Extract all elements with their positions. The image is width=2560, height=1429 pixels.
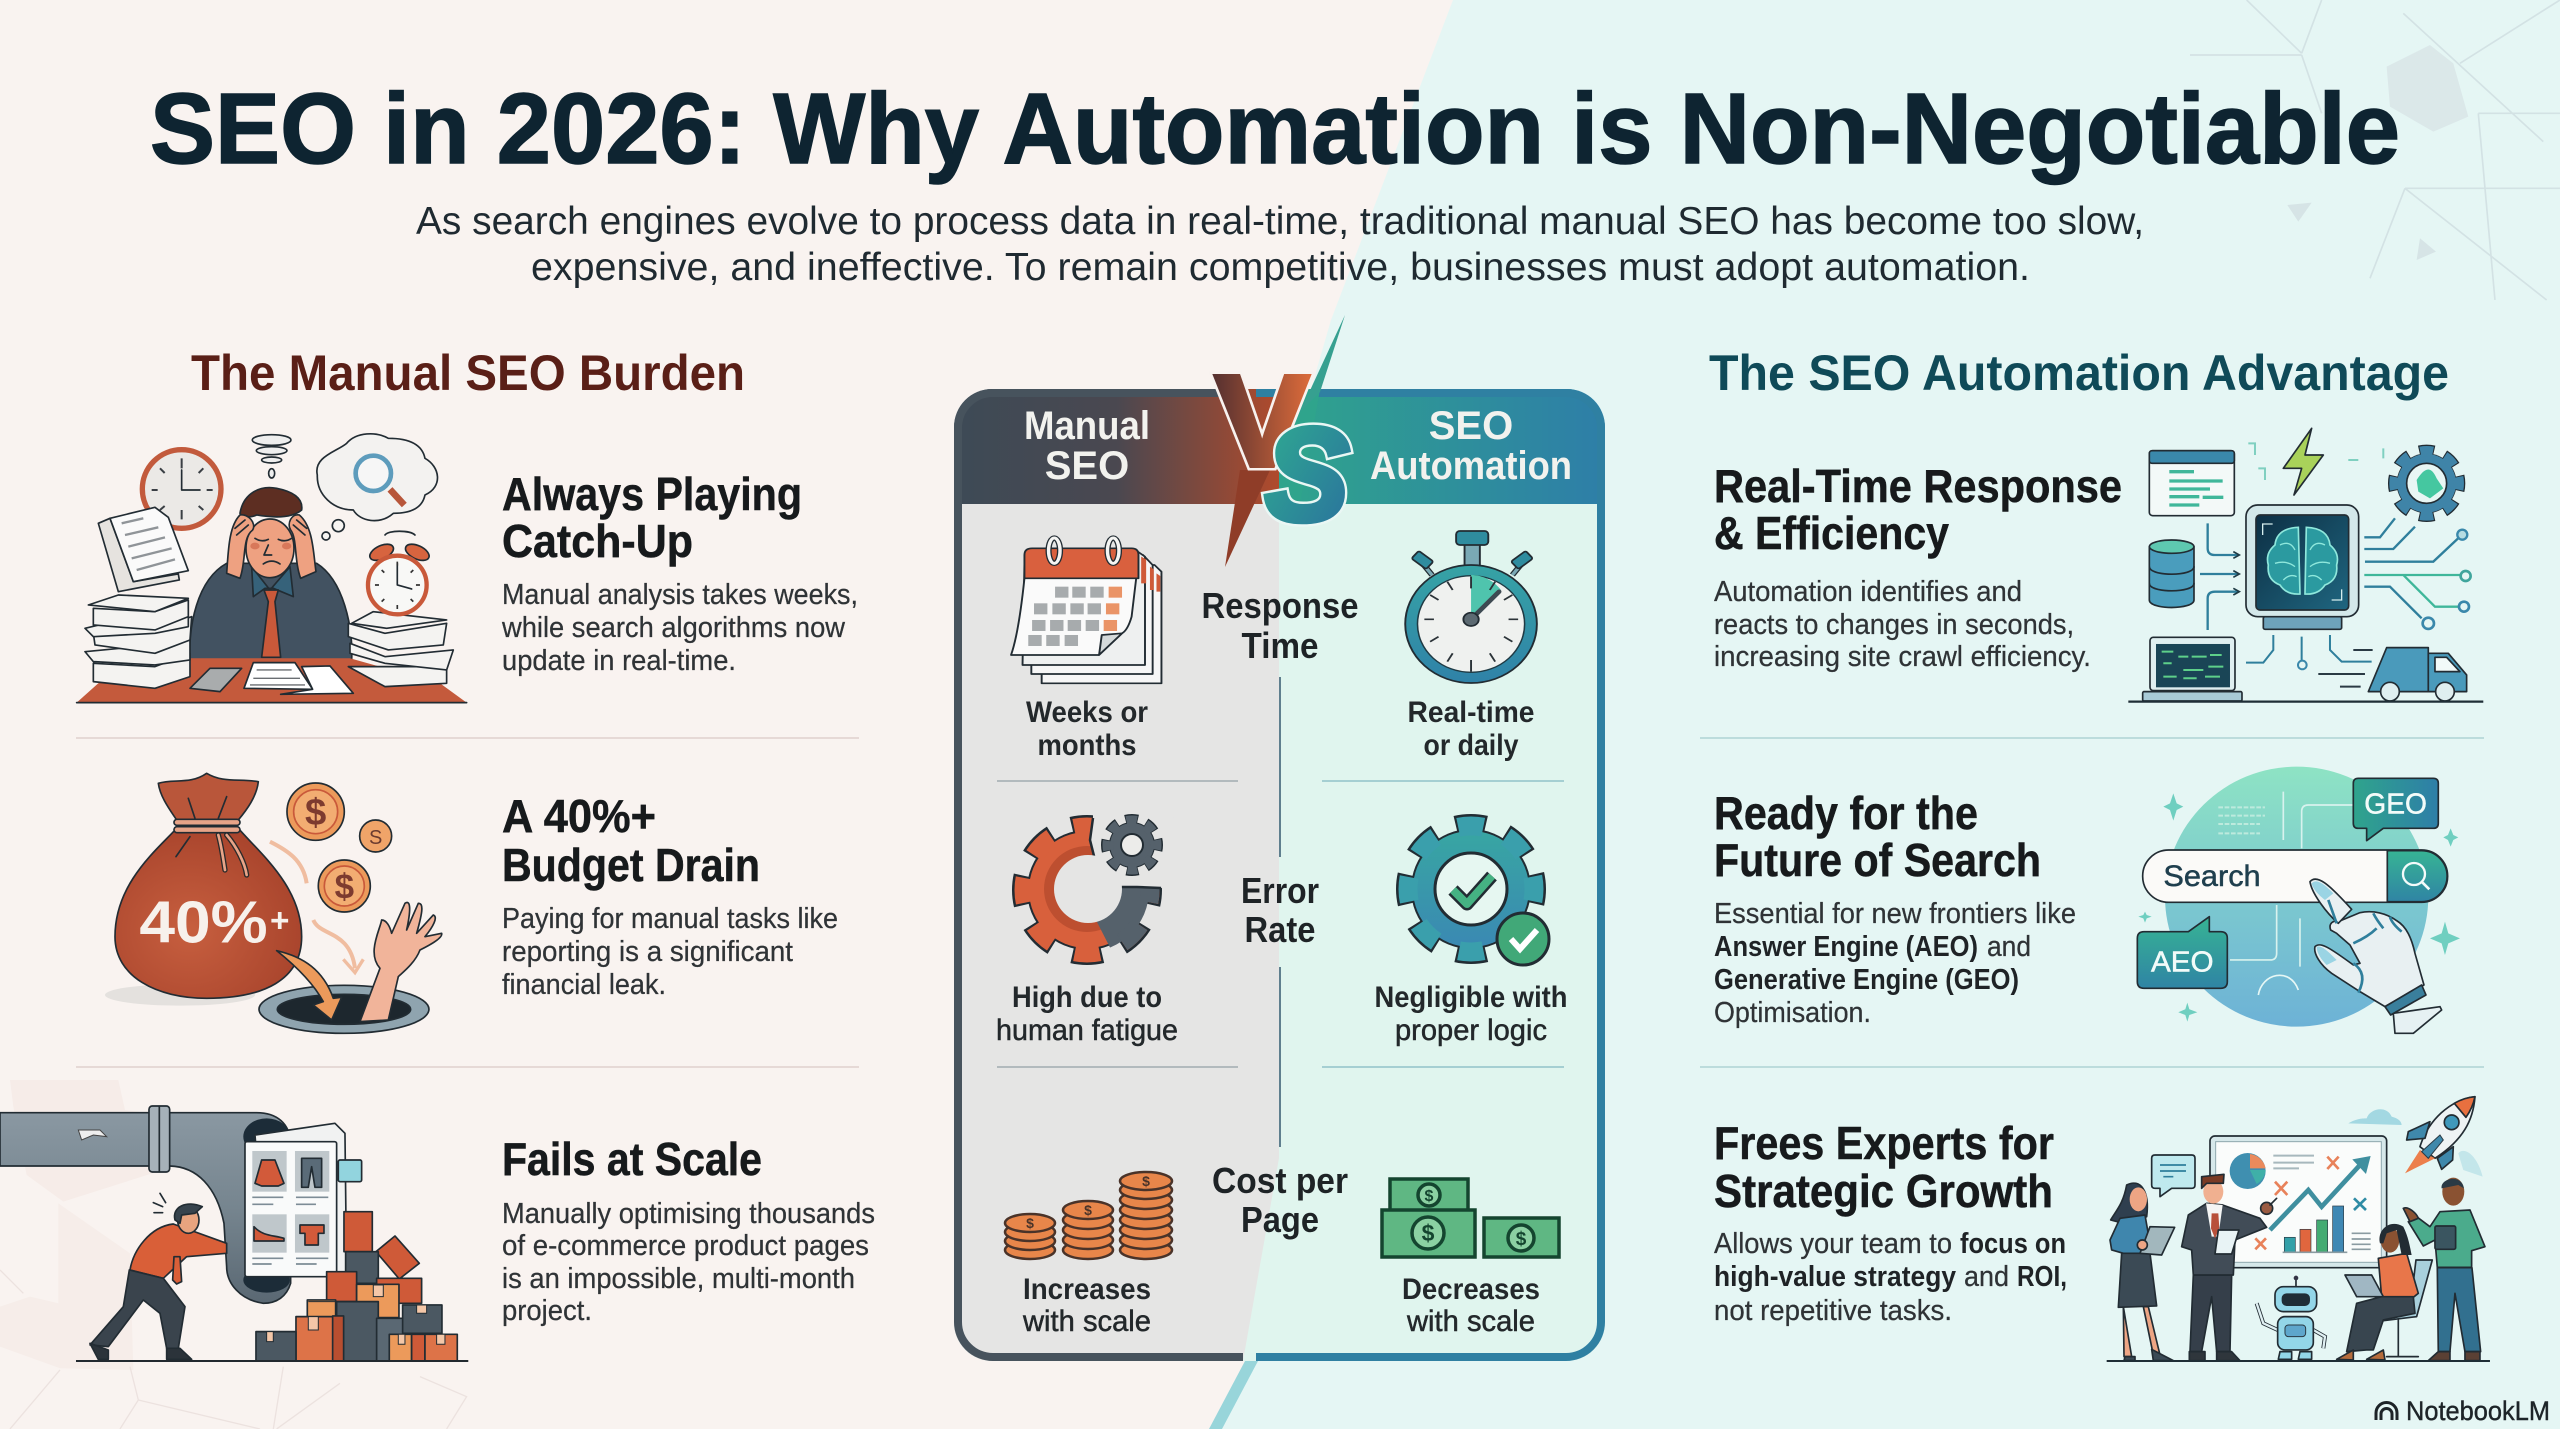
illustration: search bar with robot hand: GEO: [2364, 788, 2427, 820]
subtitle: As search engines evolve to process data in real-time, traditional manual SEO has become too slow,: [416, 200, 2144, 243]
text: Real-Time Response and Efficiency: & Efficiency: [1714, 507, 1949, 559]
text: Ready for the Future of Search: Future of Search: [1714, 834, 2041, 886]
row label: Error Rate: Rate: [1244, 909, 1316, 950]
icon: VS emblem: V: [1216, 350, 1308, 493]
icon: VS emblem: S: [1265, 401, 1349, 548]
text: High due to human fatigue: human fatigue: [996, 1014, 1178, 1047]
text: Increases with scale: Increases: [1023, 1273, 1151, 1306]
heading: The Manual SEO Burden: The Manual SEO Burden: [191, 345, 745, 401]
icon: banknotes: [1382, 1179, 1559, 1257]
text: Ready for the Future of Search: Ready for the: [1714, 787, 1978, 839]
icon: banknotes: $: [1422, 1220, 1435, 1246]
illustration: AI brain monitor network: [2128, 428, 2483, 702]
text: Fails at Scale: Fails at Scale: [502, 1133, 762, 1185]
header: SEO Automation: SEO: [1429, 404, 1513, 448]
icon: growing coin stacks: $: [1026, 1215, 1034, 1231]
text: Weeks or months: [1026, 696, 1148, 762]
illustration: search bar with robot hand: AEO: [2151, 947, 2214, 979]
text: Always Playing Catch-Up: update in real-time.: [502, 645, 736, 677]
illustration: man pushing overflowing pipe: [0, 1106, 468, 1361]
text: High due to human fatigue: [996, 981, 1178, 1047]
text: Frees Experts for Strategic Growth: [1714, 1117, 2067, 1327]
text: High due to human fatigue: High due to: [1012, 981, 1162, 1014]
text: Ready for the Future of Search: Answer Engine (AEO): [1714, 931, 1978, 963]
text: Real-Time Response and Efficiency: increasing site crawl efficiency.: [1714, 641, 2091, 673]
text: Always Playing Catch-Up: Catch-Up: [502, 515, 693, 567]
text: Real-time or daily: [1408, 696, 1534, 762]
row label: Response Time: Time: [1242, 625, 1318, 666]
text: Negligible with proper logic: Negligible with: [1374, 981, 1568, 1014]
row label: Cost per Page: Page: [1241, 1199, 1319, 1240]
subtitle: expensive, and ineffective. To remain competitive, businesses must adopt automation.: [531, 246, 2030, 289]
text: Real-Time Response and Efficiency: Automation identifies and: [1714, 576, 2022, 608]
text: A 40%+ Budget Drain: reporting is a significant: [502, 936, 793, 968]
text: Decreases with scale: with scale: [1406, 1305, 1535, 1338]
icon: growing coin stacks: [1005, 1172, 1172, 1259]
row label: Response Time: [1202, 585, 1358, 666]
icon: banknotes: $: [1516, 1229, 1527, 1250]
text: Ready for the Future of Search: [1714, 787, 2076, 1029]
text: Frees Experts for Strategic Growth: not repetitive tasks.: [1714, 1295, 1952, 1327]
text: Real-Time Response and Efficiency: [1714, 460, 2122, 673]
icon: VS emblem: S: [1265, 401, 1349, 548]
header: Manual SEO: SEO: [1045, 444, 1129, 488]
text: Increases with scale: with scale: [1022, 1305, 1151, 1338]
text: Fails at Scale: [502, 1133, 875, 1327]
text: Always Playing Catch-Up: [501, 468, 858, 677]
text: Real-time or daily: Real-time: [1408, 696, 1534, 729]
text: A 40%+ Budget Drain: Budget Drain: [502, 839, 760, 891]
heading: The SEO Automation Advantage: The SEO Automation Advantage: [1709, 345, 2449, 401]
panel: manual burden items: [0, 434, 875, 1361]
icon: calendar: [1011, 538, 1161, 683]
illustration: team with chart, robot and rocket: [2107, 1097, 2490, 1361]
text: Frees Experts for Strategic Growth: Allows your team to: [1714, 1228, 1952, 1260]
text: Fails at Scale: Manually optimising thousands: [502, 1198, 875, 1230]
text: Frees Experts for Strategic Growth: high-value strategy: [1714, 1261, 1956, 1293]
panel: comparison table: [954, 315, 1614, 1369]
text: Real-time or daily: or daily: [1424, 729, 1519, 762]
illustration: stressed man at desk: [77, 434, 467, 703]
text: Real-Time Response and Efficiency: Real-Time Response: [1714, 460, 2122, 512]
text: Real-Time Response and Efficiency: reacts to changes in seconds,: [1714, 609, 2074, 641]
text: Negligible with proper logic: proper logic: [1395, 1014, 1547, 1047]
icon: banknotes: $: [1425, 1188, 1434, 1205]
text: Frees Experts for Strategic Growth: ROI,: [2017, 1261, 2067, 1293]
illustration: money bag draining: S: [369, 827, 382, 849]
icon: gear with check: [1406, 824, 1549, 965]
text: A 40%+ Budget Drain: [502, 790, 838, 1001]
text: Ready for the Future of Search: Essential for new frontiers like: [1714, 898, 2076, 930]
text: Always Playing Catch-Up: Manual analysis takes weeks,: [502, 579, 858, 611]
text: Always Playing Catch-Up: while search algorithms now: [501, 612, 846, 644]
icon: broken gear: [1022, 805, 1175, 955]
row label: Cost per Page: Cost per: [1212, 1160, 1348, 1201]
illustration: money bag draining: [105, 773, 442, 1033]
text: Increases with scale: [1022, 1273, 1151, 1338]
icon: growing coin stacks: $: [1084, 1202, 1092, 1218]
text: Weeks or months: months: [1038, 729, 1136, 762]
text: Frees Experts for Strategic Growth: and: [1964, 1261, 2009, 1293]
text: A 40%+ Budget Drain: Paying for manual tasks like: [502, 903, 838, 935]
text: A 40%+ Budget Drain: financial leak.: [502, 969, 666, 1001]
row label: Cost per Page: [1212, 1160, 1348, 1240]
text: Ready for the Future of Search: and: [1987, 931, 2031, 963]
icon: stopwatch: [1405, 531, 1537, 683]
text: Always Playing Catch-Up: Always Playing: [502, 468, 802, 520]
subtitle: [416, 200, 2144, 289]
text: Decreases with scale: [1402, 1273, 1540, 1338]
row label: Response Time: Response: [1202, 585, 1358, 626]
text: Decreases with scale: Decreases: [1402, 1273, 1540, 1306]
icon: growing coin stacks: $: [1142, 1173, 1150, 1189]
text: Weeks or months: Weeks or: [1026, 696, 1148, 729]
illustration: money bag draining: $: [335, 867, 354, 906]
illustration: money bag draining: 40%: [139, 889, 268, 956]
header: Manual SEO: Manual: [1024, 404, 1150, 448]
header: SEO Automation: [1370, 404, 1572, 488]
header: Manual SEO: [1024, 404, 1150, 488]
icon: VS emblem: V: [1216, 350, 1308, 493]
panel: automation advantage items: [1700, 428, 2490, 1361]
row label: Error Rate: [1241, 870, 1319, 950]
logo: NotebookLM: NotebookLM: [2406, 1396, 2550, 1426]
text: A 40%+ Budget Drain: A 40%+: [502, 790, 656, 842]
text: Negligible with proper logic: [1374, 981, 1568, 1047]
header: SEO Automation: Automation: [1370, 444, 1572, 488]
text: Fails at Scale: project.: [502, 1295, 592, 1327]
text: Ready for the Future of Search: Optimisation.: [1714, 997, 1871, 1029]
text: Frees Experts for Strategic Growth: Strategic Growth: [1714, 1165, 2053, 1217]
text: Fails at Scale: of e-commerce product pages: [502, 1230, 869, 1262]
text: Ready for the Future of Search: Generative Engine (GEO): [1714, 964, 2019, 996]
illustration: money bag draining: +: [270, 903, 289, 940]
illustration: search bar with robot hand: [2137, 767, 2460, 1033]
row label: Error Rate: Error: [1241, 870, 1319, 911]
text: Fails at Scale: is an impossible, multi-month: [502, 1263, 855, 1295]
text: Frees Experts for Strategic Growth: Frees Experts for: [1714, 1117, 2054, 1169]
title: SEO in 2026: Why Automation is Non-Negotiable: [150, 73, 2400, 185]
illustration: money bag draining: $: [305, 791, 326, 834]
illustration: search bar with robot hand: Search: [2163, 860, 2261, 893]
icon: VS emblem: [1216, 315, 1349, 567]
text: Frees Experts for Strategic Growth: focus on: [1960, 1228, 2066, 1260]
